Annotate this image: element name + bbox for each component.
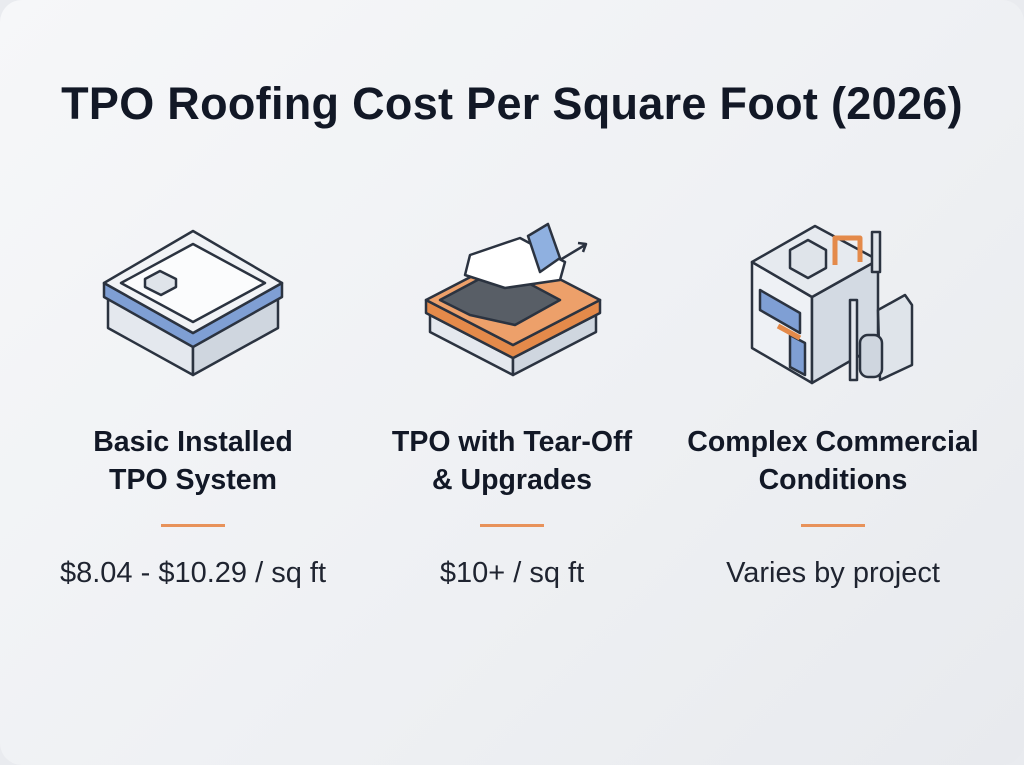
column: basic: $8.04 - $10.29 / sq ft <box>60 557 326 589</box>
icon: flat roof building <box>104 231 282 375</box>
column: complex <box>687 426 979 589</box>
column: tear-off: & Upgrades <box>432 464 592 496</box>
column: basic: Basic Installed <box>93 426 293 458</box>
column: complex: Conditions <box>759 464 907 496</box>
column: complex: Complex Commercial <box>687 426 979 458</box>
column: tear-off <box>392 426 632 589</box>
column: tear-off: $10+ / sq ft <box>440 557 584 589</box>
column: basic: TPO System <box>109 464 277 496</box>
icon: tear-off roof <box>426 224 600 375</box>
column: complex: Varies by project <box>726 557 940 589</box>
column: tear-off: TPO with Tear-Off <box>392 426 632 458</box>
column: basic <box>60 426 326 589</box>
icon: commercial building <box>752 226 912 383</box>
title: TPO Roofing Cost Per Square Foot (2026) <box>61 78 963 129</box>
